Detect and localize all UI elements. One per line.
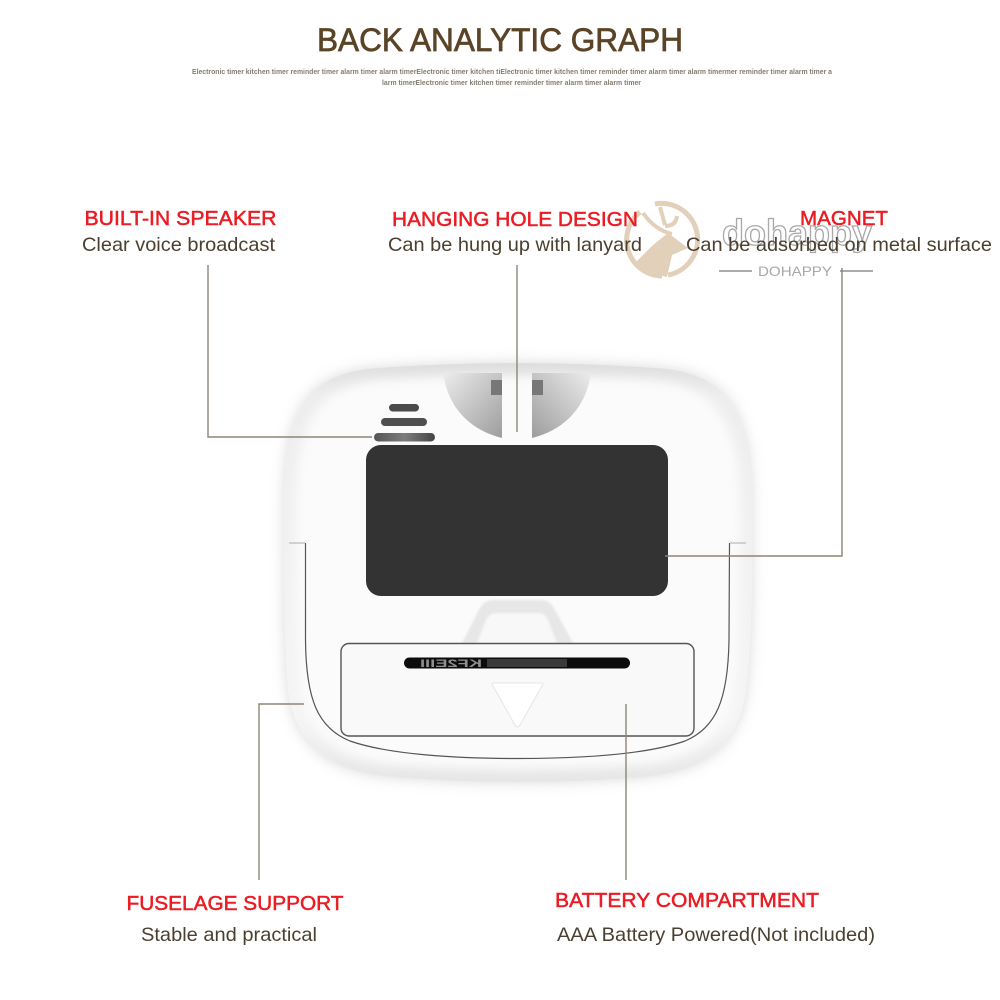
device shadow [284, 363, 752, 782]
stand tab [462, 600, 573, 643]
down triangle [492, 683, 543, 727]
speaker slots [374, 404, 435, 442]
watermark: dohappy wordmark [719, 212, 873, 279]
leader line: magnet [665, 268, 842, 556]
callout: built-in speaker [82, 208, 276, 256]
callout: fuselage support: Stable and practical [141, 924, 317, 946]
callout: battery compartment: AAA Battery Powered(Not included) [557, 924, 875, 946]
leader line: fuselage support [259, 704, 304, 880]
callout: built-in speaker: BUILT-IN SPEAKER [84, 208, 276, 230]
callout: magnet: Can be adsorbed on metal surface [686, 234, 992, 256]
watermark: dohappy wordmark: dohappy [722, 212, 872, 253]
callout: built-in speaker: Clear voice broadcast [82, 234, 276, 256]
callout: magnet [686, 208, 992, 256]
device body [284, 363, 752, 782]
callout: magnet: MAGNET [800, 208, 888, 230]
subtitle small text [192, 67, 833, 87]
battery slot [404, 658, 630, 670]
device: timer back [284, 363, 752, 782]
callout: hanging hole design: HANGING HOLE DESIGN [392, 209, 638, 231]
subtitle small text: Electronic timer kitchen timer reminder timer alarm timer alarm timerElectronic timer kitchen tiElectronic timer kitchen timer reminder timer alarm timer alarm timermer reminder timer alarm timer a [192, 67, 833, 76]
battery cover [341, 644, 694, 736]
leader line: speaker [208, 265, 372, 437]
watermark: dohappy wordmark: DOHAPPY [758, 263, 833, 279]
stand outline [306, 543, 730, 758]
callout: fuselage support: FUSELAGE SUPPORT [126, 893, 344, 915]
subtitle small text: larm timerElectronic timer kitchen timer reminder timer alarm timer alarm timer [382, 78, 641, 87]
callout: hanging hole design [388, 209, 642, 256]
title: BACK ANALYTIC GRAPH [317, 22, 683, 58]
leader line: hanging hole [516, 265, 518, 432]
battery slot: KF2EIII [420, 658, 482, 670]
callout: battery compartment [555, 890, 875, 946]
magnet plate [366, 445, 668, 596]
leader line: battery [625, 704, 627, 880]
callout: battery compartment: BATTERY COMPARTMENT [555, 890, 819, 912]
watermark: deer logo [627, 203, 698, 277]
hanging hole [443, 373, 591, 438]
callout: hanging hole design: Can be hung up with lanyard [388, 234, 642, 256]
callout: fuselage support [126, 893, 344, 946]
